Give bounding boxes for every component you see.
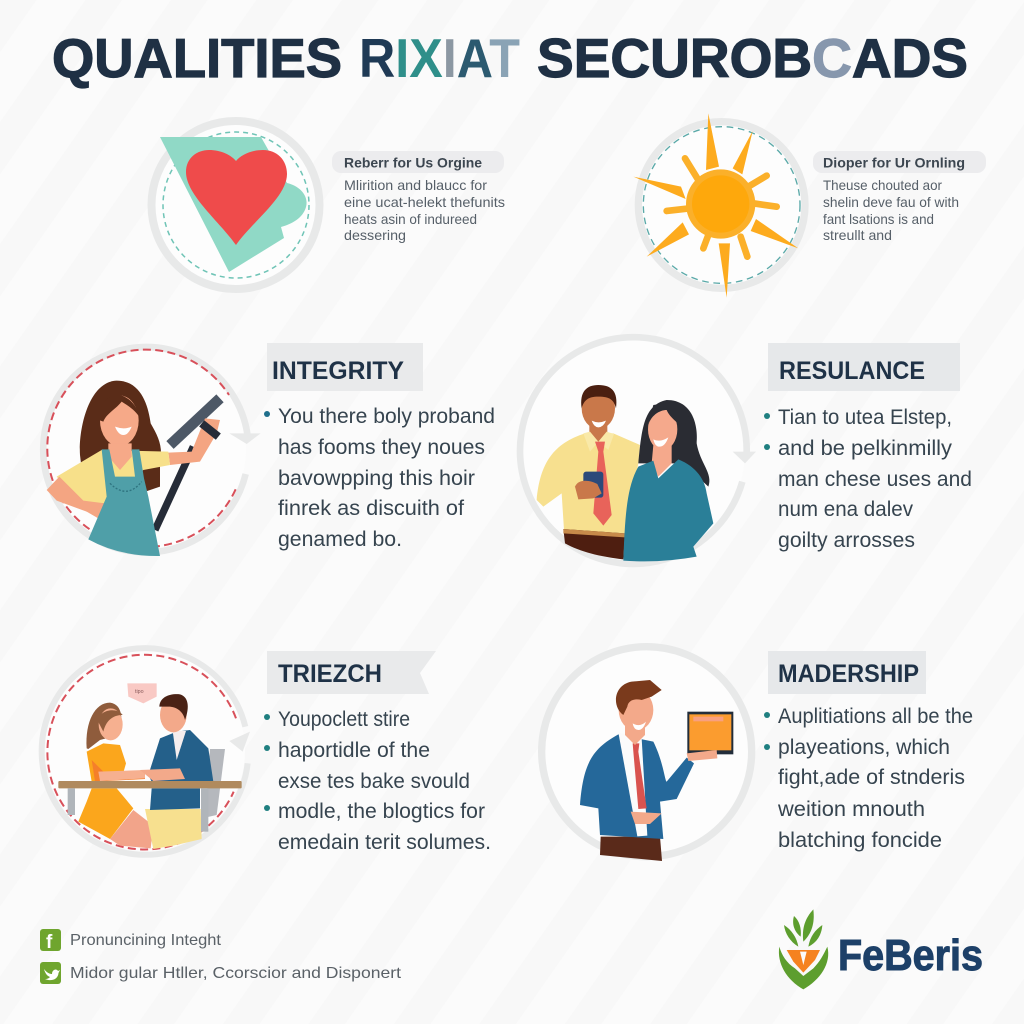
bullet list: You there boly proband — [278, 405, 495, 428]
bullet list — [764, 406, 972, 552]
bullet list: modle, the blogtics for — [278, 800, 485, 823]
bullet list: and be pelkinmilly — [778, 437, 953, 460]
panel: sun quality — [633, 113, 986, 298]
description text: fant lsations is and — [823, 211, 934, 227]
description text — [344, 177, 505, 243]
panel: resulance — [520, 337, 972, 564]
bullet list — [264, 708, 491, 854]
bullet list: goilty arrosses — [778, 529, 915, 552]
heading: resulance — [768, 343, 960, 391]
bullet list: finrek as discuith of — [278, 497, 464, 520]
bullet list: Tian to utea Elstep, — [778, 406, 952, 429]
illustration: man with tablet — [542, 647, 752, 861]
bullet list: weition mnouth — [777, 798, 925, 821]
heading: triezch: TRIEZCH — [278, 660, 382, 688]
icon: facebook: f — [46, 932, 53, 953]
bullet list: man chese uses and — [778, 468, 972, 491]
bullet list: bavowpping this hoir — [278, 467, 475, 490]
panel: madership — [542, 647, 973, 861]
illustration: man and woman — [520, 337, 756, 564]
logo wordmark: FeBeris — [838, 931, 983, 980]
icon: logo emblem — [779, 909, 828, 989]
bullet list — [764, 705, 973, 852]
icon: heart in ring — [152, 121, 320, 289]
description text: heats asin of indureed — [344, 211, 477, 227]
footer line two: Midor gular Htller, Ccorscior and Disponert — [70, 965, 402, 982]
title: RIXIAT — [359, 27, 520, 89]
logo — [779, 909, 983, 989]
panel: triezch — [42, 648, 491, 855]
heading: integrity — [267, 343, 423, 391]
description text: dessering — [344, 227, 406, 243]
description text: Theuse chouted aor — [823, 177, 942, 193]
illustration: couple at table — [42, 648, 250, 855]
description text — [823, 177, 959, 243]
bullet list: Youpoclett stire — [278, 708, 410, 731]
panel: integrity — [43, 343, 495, 556]
footer line one: Pronuncining Integht — [70, 932, 222, 949]
label pill — [813, 151, 986, 173]
illustration: couple at table: tipo — [135, 689, 144, 695]
heading: resulance: RESULANCE — [779, 357, 925, 385]
footer: social lines — [40, 929, 402, 984]
icon: sun in ring — [633, 113, 805, 298]
bullet list: haportidle of the — [278, 739, 430, 762]
bullet list: num ena dalev — [778, 498, 913, 521]
description text: streullt and — [823, 227, 892, 243]
bullet list: exse tes bake svould — [278, 770, 470, 793]
bullet list: Auplitiations all be the — [778, 705, 973, 728]
bullet list: blatching foncide — [778, 829, 942, 852]
icon: twitter — [40, 962, 61, 984]
description text: Mlirition and blaucc for — [344, 177, 487, 193]
bullet list: emedain terit solumes. — [278, 831, 491, 854]
label pill — [332, 151, 504, 173]
bullet list: playeations, which — [778, 736, 950, 759]
illustration: woman with tool — [43, 347, 261, 556]
bullet list — [264, 405, 495, 551]
heading: madership — [768, 651, 926, 694]
heading: madership: MADERSHIP — [778, 660, 919, 688]
label pill: Dioper for Ur Ornling — [823, 154, 965, 170]
icon: facebook — [40, 929, 61, 953]
bullet list: has fooms they noues — [278, 436, 485, 459]
title: SECUROBCADS — [537, 27, 968, 89]
bullet list: genamed bo. — [278, 528, 402, 551]
description text: shelin deve fau of with — [823, 194, 959, 210]
panel: heart quality — [152, 121, 505, 289]
heading: integrity: INTEGRITY — [272, 357, 404, 385]
bullet list: fight,ade of stnderis — [778, 766, 965, 789]
label pill: Reberr for Us Orgine — [344, 154, 482, 170]
description text: eine ucat-helekt thefunits — [344, 194, 505, 210]
heading: triezch — [267, 651, 436, 694]
title — [52, 27, 968, 89]
title: QUALITIES — [52, 27, 342, 89]
